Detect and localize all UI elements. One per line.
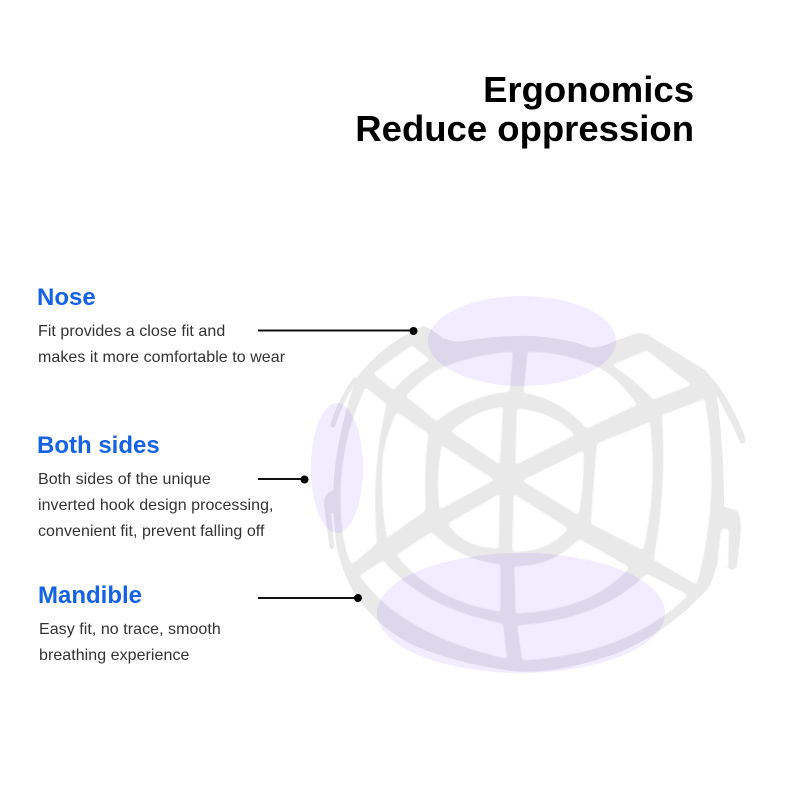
frame silhouette [324, 326, 745, 672]
heading: Mandible: Mandible [38, 582, 142, 609]
text: Mandible description: breathing experience [39, 647, 189, 664]
text: Nose description [38, 323, 285, 366]
text: Both sides description: convenient fit, prevent falling off [38, 523, 264, 540]
title [355, 69, 694, 149]
mask frame [324, 326, 745, 672]
title: Reduce oppression [355, 108, 694, 149]
left hook strand [333, 380, 355, 425]
title: Ergonomics [483, 69, 694, 110]
heading: Nose: Nose [37, 284, 96, 311]
text: Nose description: Fit provides a close fit and [38, 323, 225, 340]
text: Mandible description: Easy fit, no trace, smooth [39, 621, 221, 638]
highlight: both sides [311, 403, 363, 533]
highlight: mandible [377, 553, 665, 673]
text: Both sides description: inverted hook design processing, [38, 497, 274, 514]
leader line: both sides [258, 476, 308, 484]
leader line: nose [258, 327, 418, 335]
frame openings [340, 345, 729, 661]
leader line: mandible [258, 594, 362, 602]
text: Mandible description [39, 621, 221, 664]
heading: Both sides: Both sides [37, 432, 160, 459]
text: Nose description: makes it more comfortable to wear [38, 349, 285, 366]
text: Both sides description [38, 471, 274, 540]
highlight: nose [428, 296, 616, 386]
text: Both sides description: Both sides of the unique [38, 471, 211, 488]
